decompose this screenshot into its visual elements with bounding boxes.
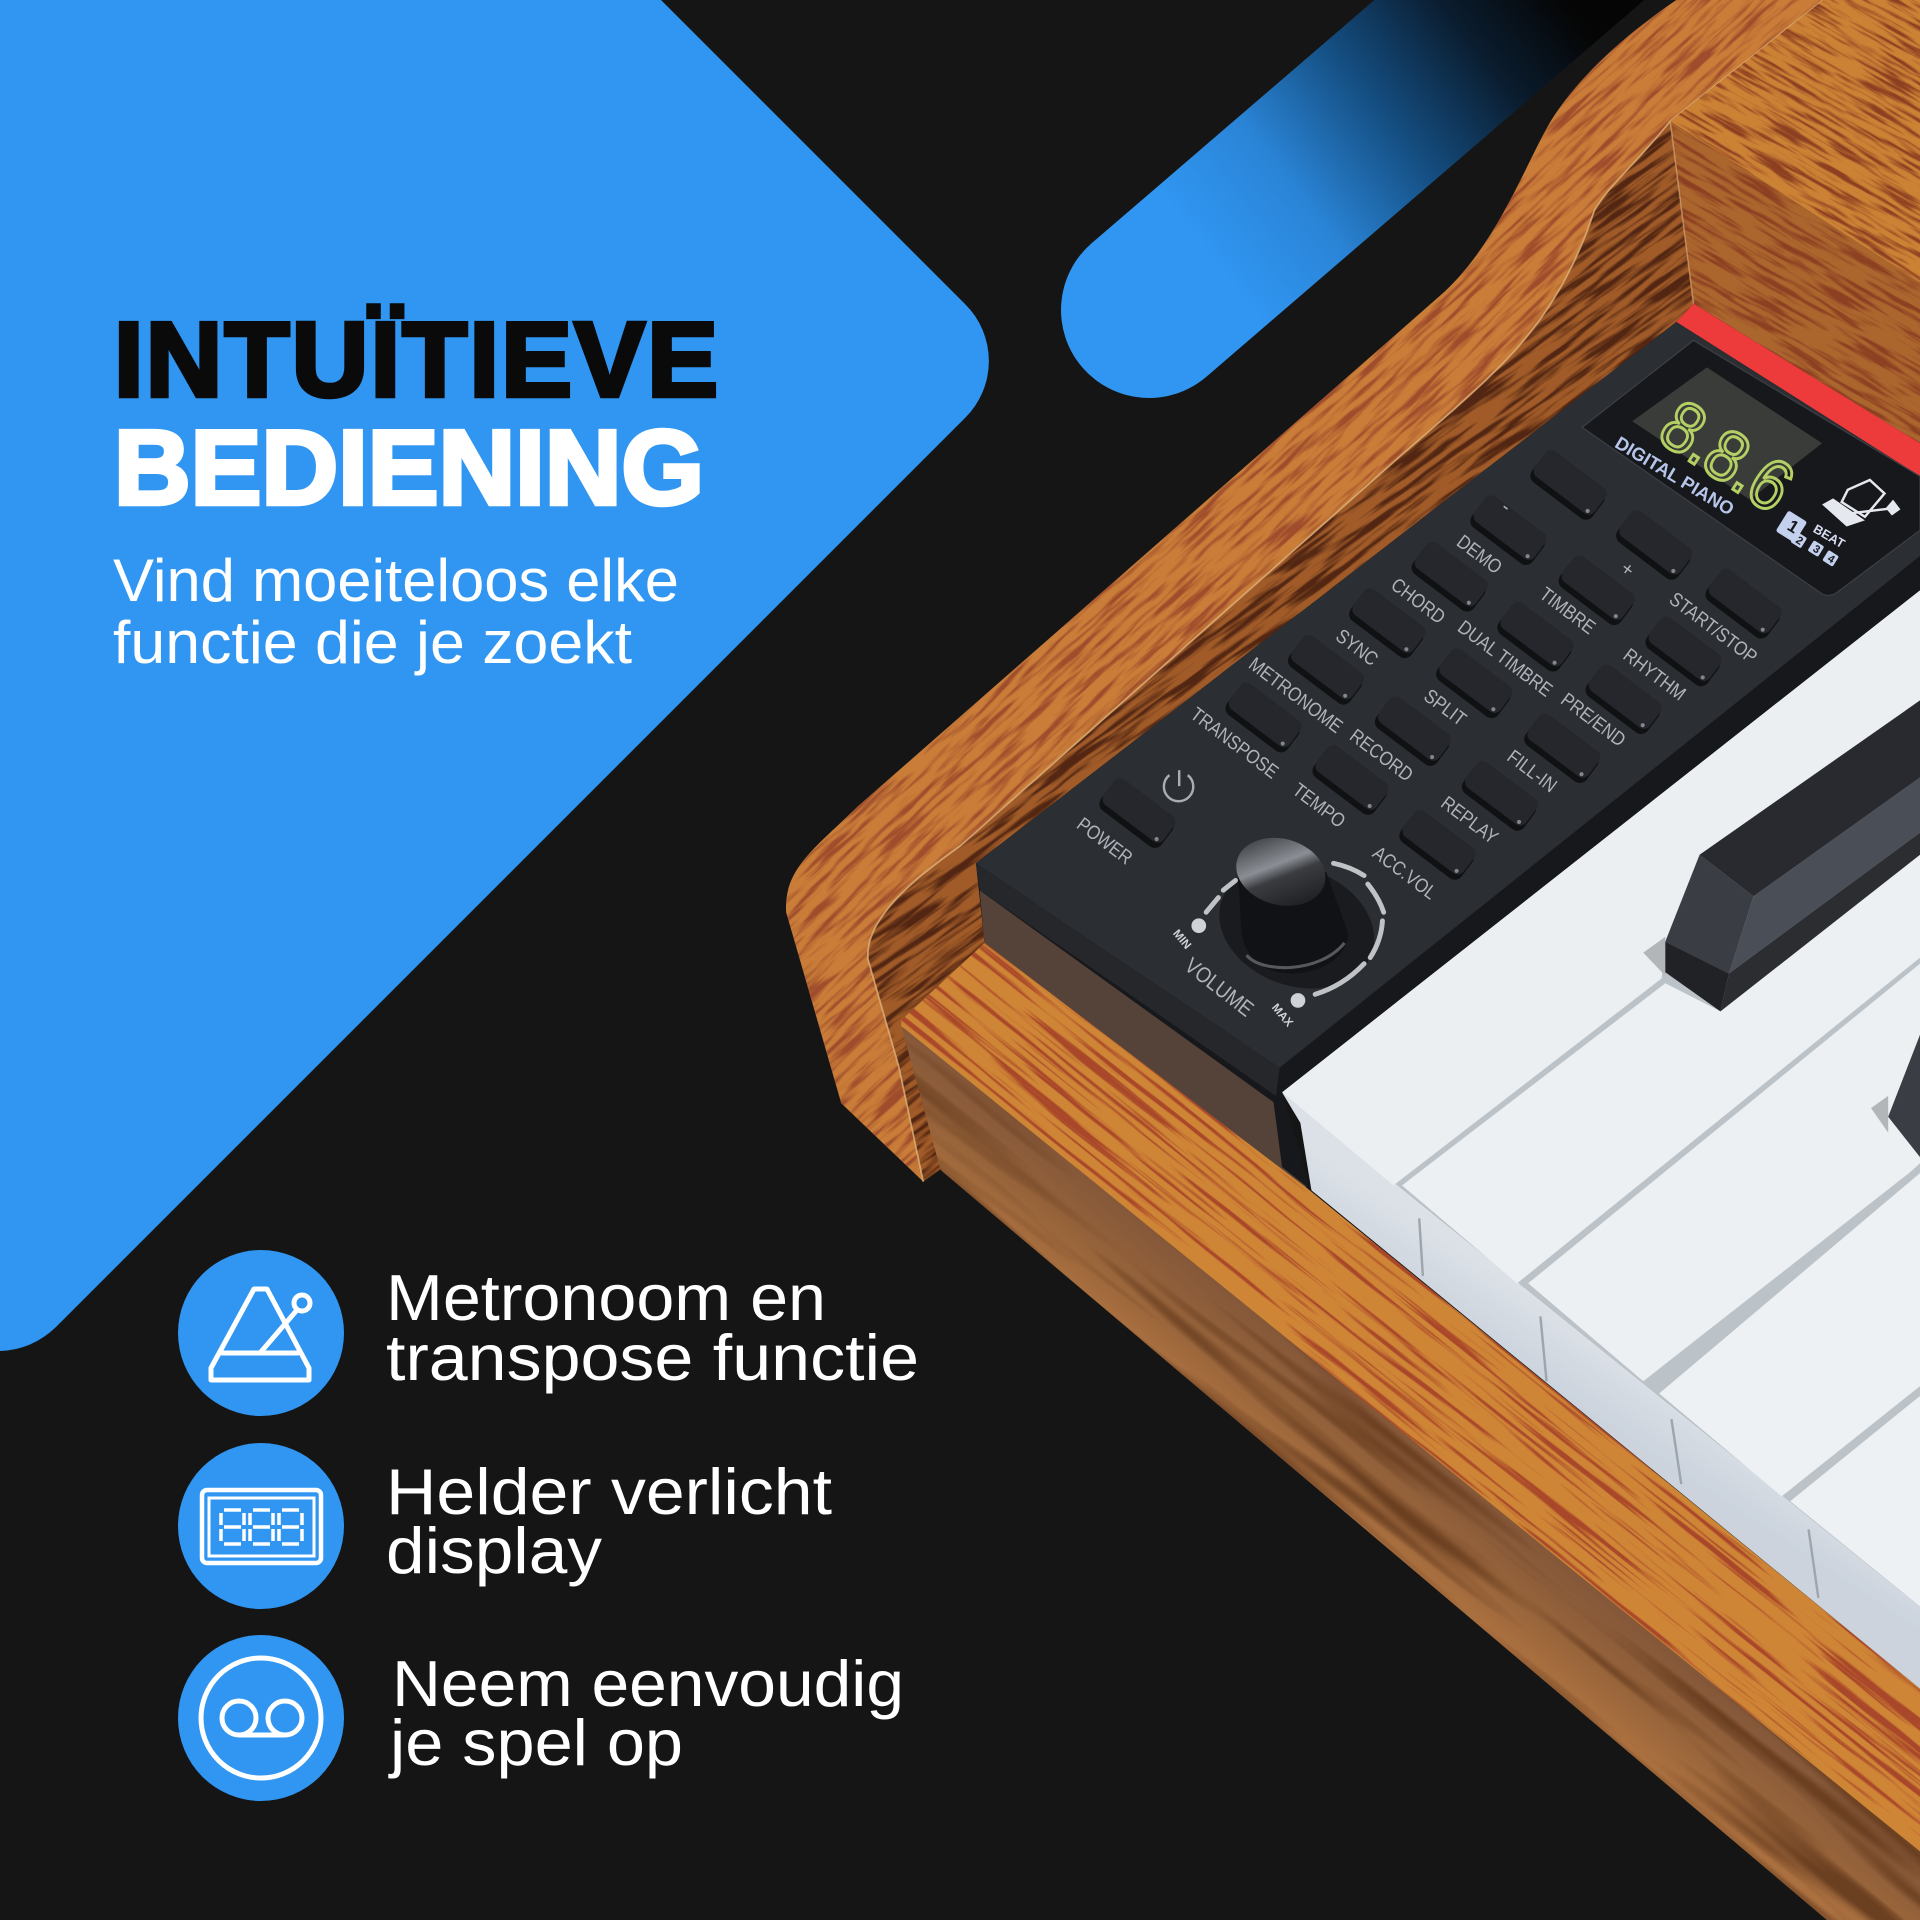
key fronts [1282, 1092, 1920, 1689]
button labels: METRONOME [1245, 652, 1347, 737]
button labels: - [1497, 496, 1515, 518]
icon: LED display [178, 1443, 344, 1609]
white keys [1282, 590, 1920, 1689]
title line 1: INTUÏTIEVE [114, 301, 718, 419]
icon: record tape [178, 1635, 344, 1801]
text: metronome: transpose functie [386, 1321, 919, 1394]
beat indicator: 2 [1793, 534, 1805, 548]
button labels: POWER [1073, 812, 1137, 869]
beat indicator: BEAT [1811, 521, 1848, 551]
button labels: FILL-IN [1503, 745, 1562, 797]
blue diagonal panel [0, 0, 989, 1351]
icon: metronome [178, 1250, 344, 1416]
buttons [1096, 447, 1786, 883]
text: display: Helder verlicht [386, 1455, 832, 1528]
feature: metronome [178, 1250, 919, 1416]
title [114, 301, 718, 527]
button labels: TIMBRE [1536, 582, 1600, 638]
button labels: SYNC [1332, 624, 1383, 670]
button labels: PRE/END [1557, 688, 1630, 751]
button labels: ACC.VOL [1369, 841, 1441, 904]
red felt strip [1676, 304, 1920, 476]
curved rim [786, 0, 1823, 1182]
inner wood wall [868, 121, 1693, 1182]
button labels: + [1616, 557, 1638, 582]
title line 2: BEDIENING [114, 409, 704, 527]
LCD screen [1632, 367, 1822, 500]
text: record: Neem eenvoudig [392, 1647, 904, 1720]
text: display: display [386, 1514, 603, 1587]
button labels: REPLAY [1437, 791, 1503, 848]
feature: display [178, 1443, 832, 1609]
wood block front face [1670, 121, 1920, 443]
button labels: TRANSPOSE [1187, 702, 1283, 783]
subtitle [113, 547, 679, 676]
text: record: je spel op [388, 1706, 683, 1779]
button labels: MIN [1170, 927, 1194, 952]
button labels: TEMPO [1289, 778, 1350, 832]
button labels: DUAL TIMBRE [1454, 615, 1557, 701]
power symbol [1164, 770, 1193, 801]
digital piano label: DIGITAL PIANO [1612, 432, 1738, 519]
back wood frame [786, 0, 1920, 1182]
small metronome icon [1822, 480, 1900, 527]
wood front rail [901, 943, 1920, 1920]
button labels [1073, 496, 1762, 1030]
wood block top face [1670, 0, 1920, 283]
brown felt [980, 890, 1307, 1188]
button labels: RHYTHM [1619, 643, 1690, 705]
text: metronome: Metronoom en [386, 1261, 826, 1334]
button labels: SPLIT [1420, 684, 1471, 730]
button labels: MAX [1269, 1001, 1296, 1030]
text: record [388, 1647, 904, 1779]
key gap base [1282, 590, 1920, 1607]
digital piano photo [786, 0, 1920, 1920]
button labels: CHORD [1387, 573, 1450, 628]
beat indicator: 4 [1825, 553, 1838, 567]
display housing [1582, 340, 1920, 595]
text: metronome [386, 1261, 919, 1394]
gradient pill decoration [1149, 0, 1600, 310]
button labels: VOLUME [1180, 953, 1258, 1022]
control panel [976, 322, 1920, 1190]
button labels: RECORD [1346, 724, 1418, 786]
subtitle: functie die je zoekt [113, 609, 632, 676]
beat indicator: 1 [1784, 515, 1803, 538]
volume knob [1191, 828, 1392, 1009]
subtitle: Vind moeiteloos elke [113, 547, 679, 614]
text: display [386, 1455, 832, 1587]
LCD digits: 8.8.6 [1646, 384, 1807, 527]
button labels: DEMO [1453, 530, 1507, 578]
button labels: START/STOP [1665, 587, 1762, 668]
beat indicator [1776, 510, 1848, 567]
black keys [1643, 700, 1920, 1157]
feature: record [178, 1635, 904, 1801]
beat indicator: 3 [1811, 543, 1822, 556]
